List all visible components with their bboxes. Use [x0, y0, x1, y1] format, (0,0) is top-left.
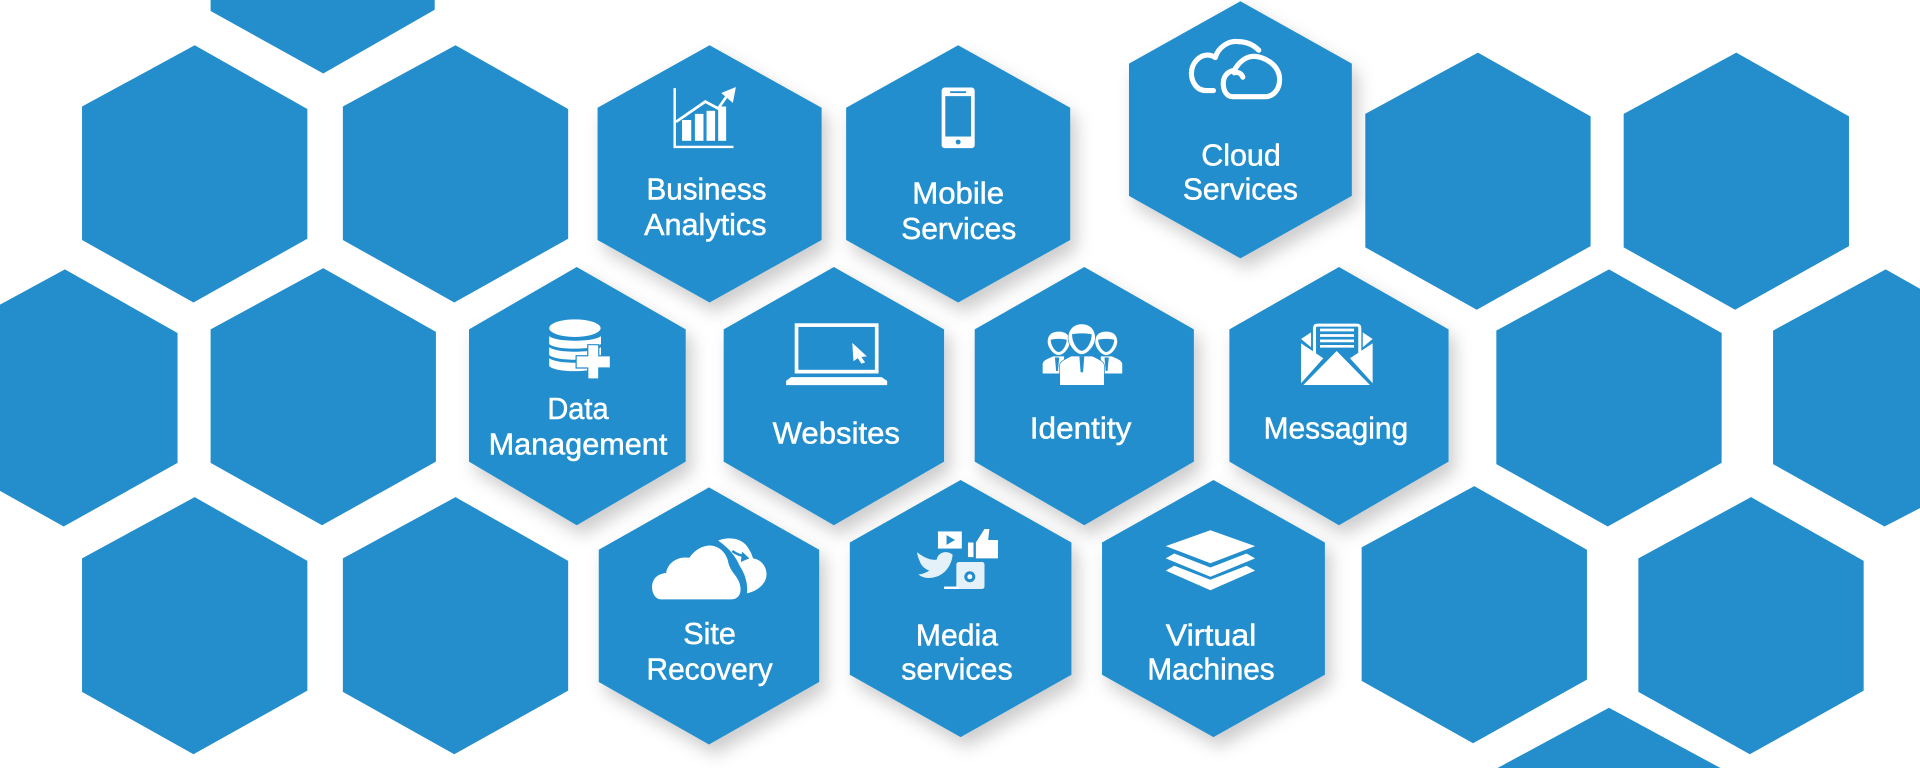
panel: Websites [724, 267, 944, 525]
hexagon [598, 45, 822, 302]
icon: three people [1043, 324, 1122, 385]
icon: stacked layers [1166, 530, 1255, 590]
label: Data [547, 392, 609, 426]
label: Websites [773, 416, 900, 450]
label: services [901, 653, 1013, 687]
icon: smartphone [942, 88, 975, 148]
hexagon [975, 267, 1194, 525]
label: Services [1183, 173, 1298, 207]
label: Identity [1030, 411, 1132, 445]
panel: Media services [850, 480, 1071, 737]
hexagon [846, 45, 1070, 302]
panel: Data Management [469, 267, 686, 525]
panel: Cloud Services [1129, 1, 1352, 258]
hexagon [469, 267, 686, 525]
icon: open envelope with letter [1301, 325, 1373, 385]
hexagon [724, 267, 944, 525]
hexagon [599, 487, 819, 744]
panel: Identity [975, 267, 1194, 525]
hexagon [1102, 480, 1325, 737]
icon: social media [917, 529, 998, 589]
panel: Site Recovery [599, 487, 819, 744]
icon: database with plus [549, 319, 610, 378]
panel: Messaging [1229, 267, 1449, 525]
panel: Business Analytics [598, 45, 822, 302]
hexagon [1129, 1, 1352, 258]
label: Messaging [1264, 411, 1408, 445]
label: Virtual [1166, 618, 1256, 652]
icon: laptop with cursor [786, 325, 887, 385]
label: Site [683, 617, 736, 651]
label: Management [489, 427, 668, 461]
label: Services [901, 212, 1016, 246]
label: Mobile [912, 176, 1004, 210]
label: Media [916, 618, 999, 652]
label: Analytics [644, 208, 767, 242]
hexagon [1229, 267, 1449, 525]
label: Machines [1147, 653, 1275, 687]
icon: rising bar chart [675, 87, 736, 147]
label: Recovery [647, 653, 773, 687]
icon: two clouds [1191, 41, 1280, 97]
label: Cloud [1201, 138, 1281, 172]
panel: Virtual Machines [1102, 480, 1325, 737]
label: Business [647, 173, 767, 207]
icon: clouds with recovery arrow [652, 538, 767, 599]
panel: Mobile Services [846, 45, 1070, 302]
hexagon [850, 480, 1071, 737]
